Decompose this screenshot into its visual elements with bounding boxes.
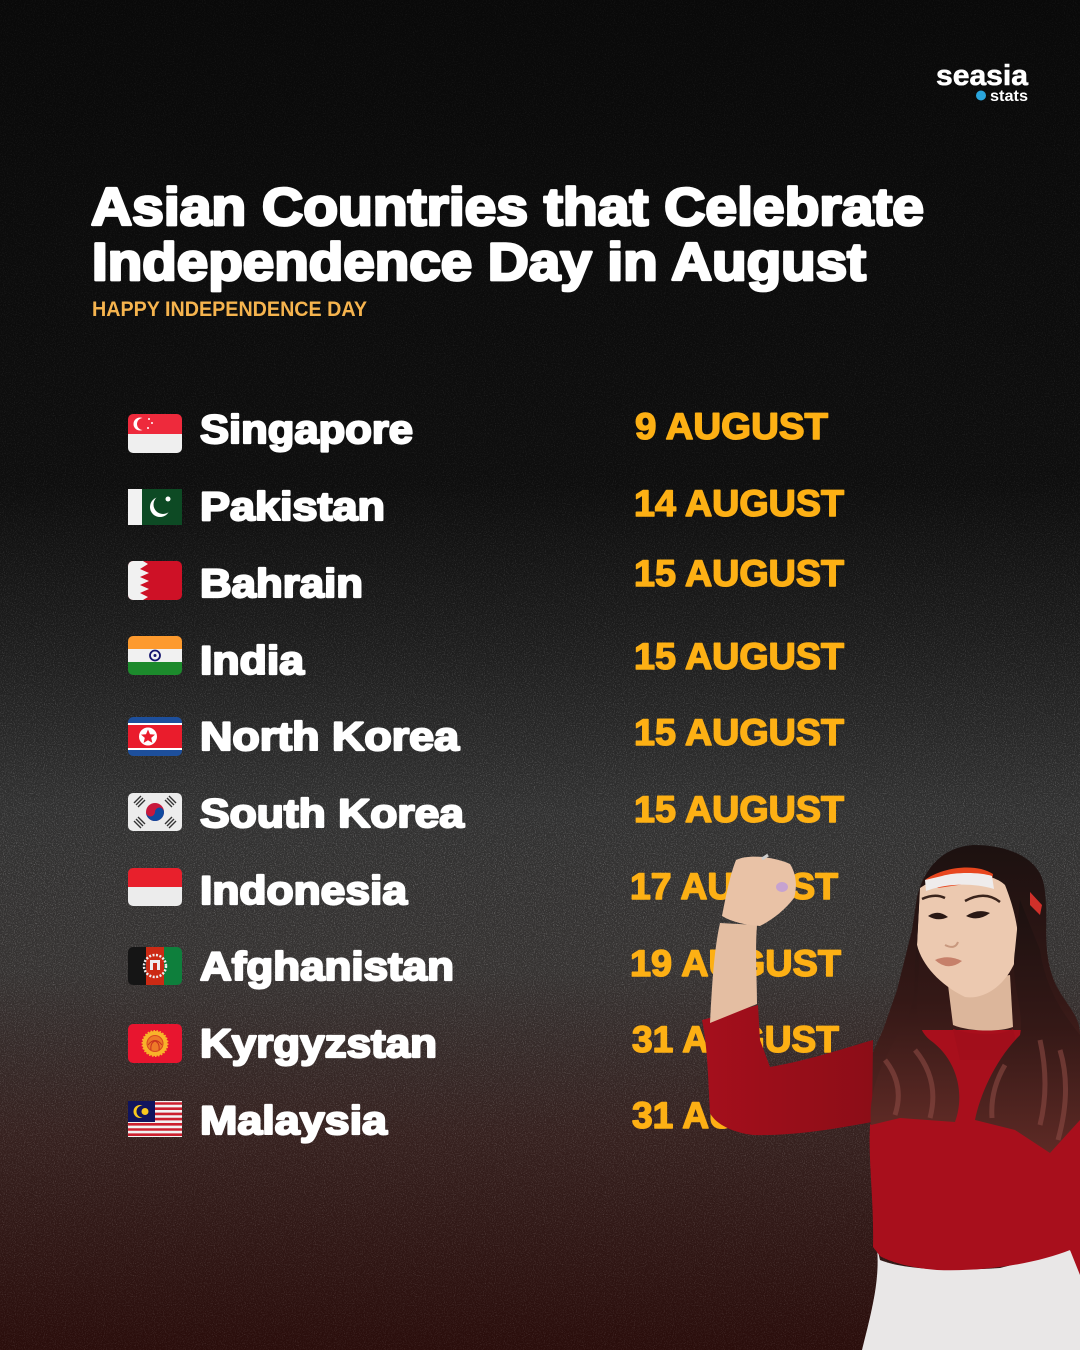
- row: Malaysia: [128, 1095, 839, 1143]
- hair back: [868, 845, 1080, 1154]
- icon: flag of Pakistan: [128, 489, 182, 525]
- forearm: [710, 923, 757, 1023]
- row: Indonesia: 17 AUGUST: [630, 866, 838, 907]
- row: Kyrgyzstan: [128, 1019, 839, 1066]
- row: Kyrgyzstan: Kyrgyzstan: [200, 1022, 437, 1066]
- row: Singapore: Singapore: [200, 408, 413, 452]
- fingernail and ring: [762, 855, 788, 892]
- title: Independence Day in August: [92, 233, 866, 292]
- row: Bahrain: [128, 559, 844, 600]
- row: North Korea: [128, 717, 844, 756]
- row: Malaysia: Malaysia: [200, 1099, 388, 1143]
- row: Pakistan: Pakistan: [200, 485, 385, 529]
- logo: seasia stats: stats: [990, 88, 1028, 105]
- row: Indonesia: Indonesia: [200, 869, 408, 913]
- icon: flag of South Korea: [128, 793, 182, 831]
- row: Afghanistan: [128, 943, 841, 989]
- hair front left strand: [871, 885, 959, 1125]
- row: North Korea: 15 AUGUST: [634, 712, 844, 753]
- headband: [925, 867, 1042, 915]
- row: South Korea: South Korea: [200, 792, 465, 836]
- row: Indonesia: [128, 868, 838, 906]
- neck: [948, 975, 1013, 1031]
- icon: flag of Singapore: [128, 414, 182, 453]
- woman with raised fist: [702, 845, 1080, 1350]
- row: South Korea: 15 AUGUST: [634, 789, 844, 830]
- icon: flag of Malaysia: [128, 1101, 182, 1137]
- skirt: [862, 1247, 1080, 1350]
- row: Singapore: [128, 412, 828, 453]
- icon: flag of Indonesia: [128, 868, 182, 906]
- row: Pakistan: 14 AUGUST: [634, 483, 844, 524]
- title: [91, 178, 924, 292]
- row: India: [128, 636, 844, 676]
- hair highlights: [885, 1040, 1066, 1140]
- row: Pakistan: [128, 483, 844, 529]
- row: India: 15 AUGUST: [634, 636, 844, 677]
- row: Afghanistan: Afghanistan: [200, 945, 454, 989]
- logo: seasia stats: seasia: [936, 60, 1029, 92]
- icon: flag of Kyrgyzstan: [128, 1024, 182, 1063]
- eyes, nose and lips: [922, 896, 1000, 966]
- torso: [870, 1030, 1080, 1275]
- row: North Korea: North Korea: [200, 715, 460, 759]
- raised arm sleeve: [702, 1005, 873, 1135]
- fist: [722, 857, 796, 926]
- row: Singapore: 9 AUGUST: [635, 406, 828, 447]
- row: Kyrgyzstan: 31 AUGUST: [632, 1019, 839, 1060]
- icon: flag of Afghanistan: [128, 947, 182, 985]
- face: [917, 874, 1018, 997]
- row: Malaysia: 31 AUGUST: [632, 1095, 839, 1136]
- row: India: India: [200, 639, 305, 683]
- row: South Korea: [128, 789, 844, 836]
- icon: flag of India: [128, 636, 182, 675]
- row: Bahrain: Bahrain: [200, 562, 363, 606]
- subtitle: HAPPY INDEPENDENCE DAY: [92, 298, 367, 321]
- logo: seasia stats: [936, 60, 1029, 105]
- row: Afghanistan: 19 AUGUST: [630, 943, 841, 984]
- row: Bahrain: 15 AUGUST: [634, 553, 844, 594]
- icon: flag of North Korea: [128, 717, 182, 756]
- neckline: [953, 1029, 1020, 1060]
- hair front right strand: [975, 900, 1080, 1153]
- title: Asian Countries that Celebrate: [91, 178, 924, 237]
- icon: flag of Bahrain: [128, 561, 182, 600]
